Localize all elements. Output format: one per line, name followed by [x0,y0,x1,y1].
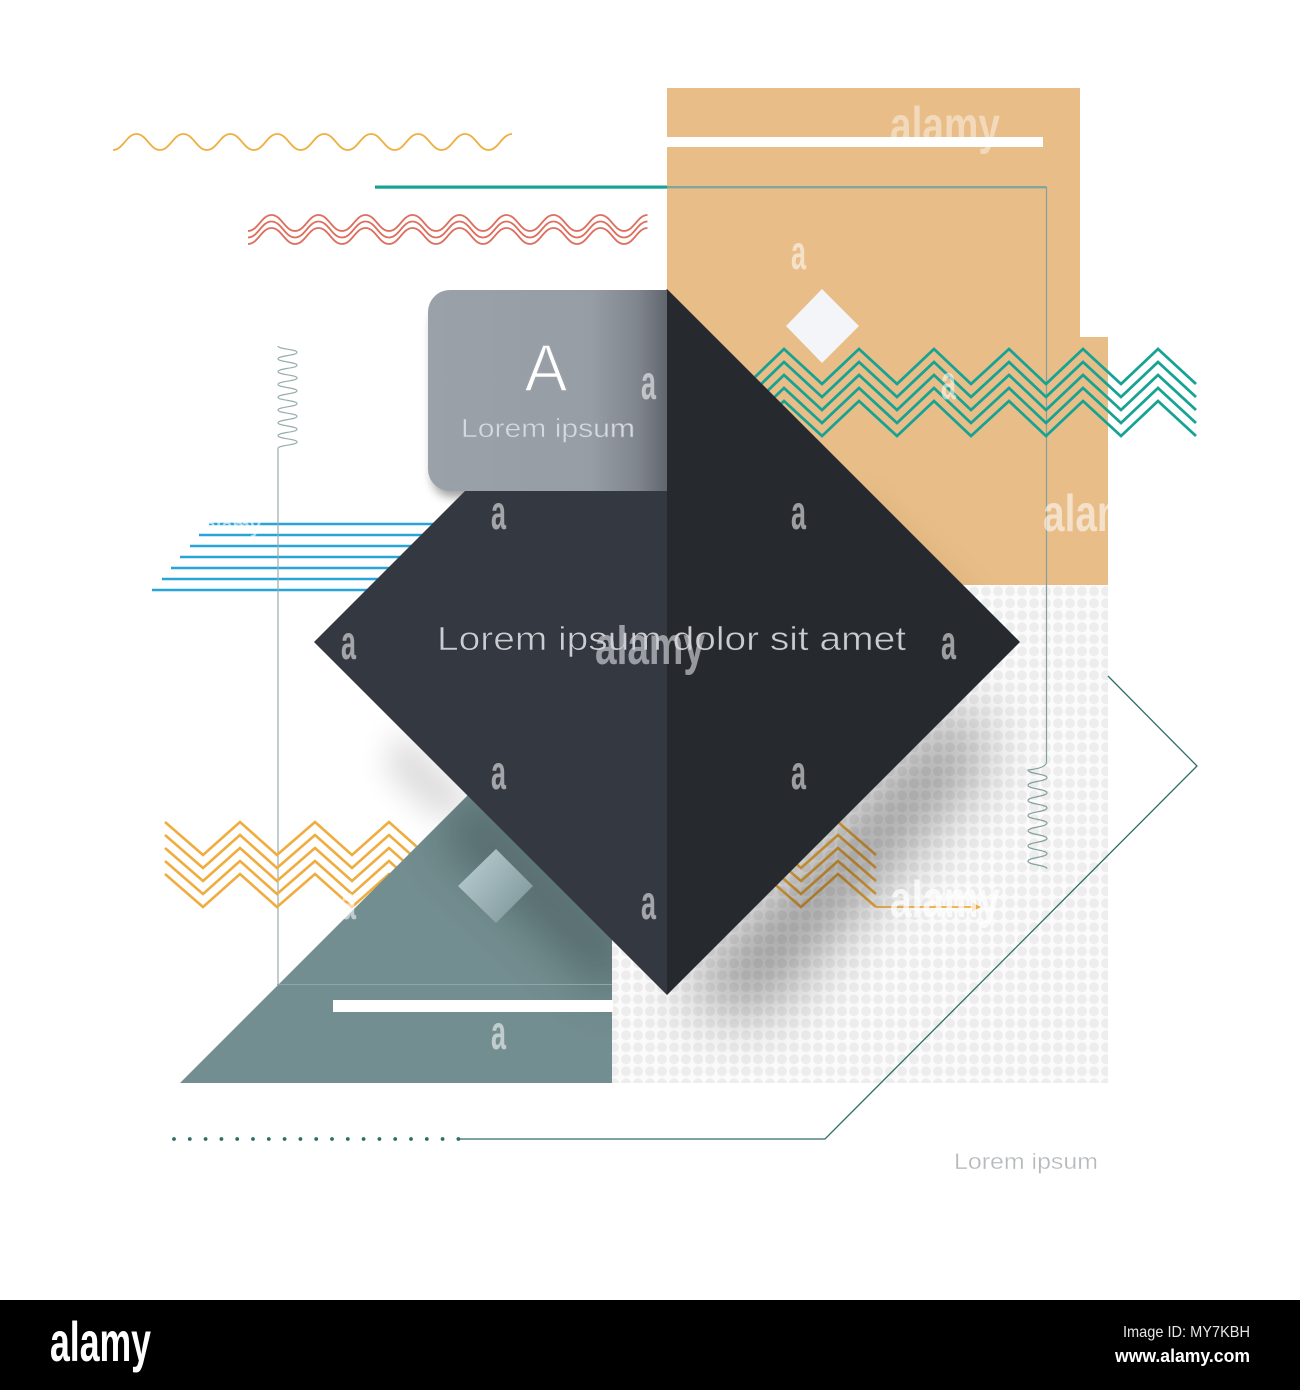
teal line, on white [375,186,667,189]
green outline connector [458,676,1197,1139]
footer bar [0,1300,1300,1390]
watermark marks: a [491,1007,506,1060]
white bar on triangle [333,1000,613,1012]
watermark marks: alamy [205,516,262,538]
panel: peach block [667,88,1108,585]
slate triangle [180,651,612,1083]
footer url: www.alamy.com [1114,1346,1250,1366]
watermark marks: a [791,747,806,800]
watermark marks: a [491,487,506,540]
card shadow [432,305,657,497]
central dark diamond [314,289,1020,995]
white diamond on peach [786,289,859,363]
watermark marks: alamy [890,871,1000,929]
watermark marks: a [941,617,956,670]
watermark marks: a [941,357,956,410]
watermark marks: alamy [595,616,705,676]
bottom right caption: Lorem ipsum [954,1149,1098,1174]
dot grid panel [612,585,1108,1083]
shadow on triangle [432,796,612,1000]
watermark marks: a [641,877,656,930]
teal line with thin vertical and spring [667,187,1047,869]
salmon triple wave [248,215,648,244]
watermark marks: a [491,747,506,800]
yellow wave line [113,134,512,150]
light diamond on triangle [458,849,533,923]
card letter: A [524,331,568,406]
footer logo: alamy [50,1310,151,1373]
footer image id: Image ID: MY7KBH [1123,1324,1250,1341]
orange zigzag [165,822,876,907]
teal zigzag [755,349,1196,436]
watermark marks [205,97,1153,1060]
watermark marks: a [791,487,806,540]
blue horizontal lines [152,524,440,590]
white bar on peach [667,137,1043,147]
shadow on white, left of diamond [385,728,480,820]
watermark marks: a [641,357,656,410]
watermark marks: alamy [890,97,1000,155]
left spring and thin vertical line [278,346,297,985]
dotted line [174,1137,459,1141]
watermark marks: a [791,227,806,280]
watermark marks: a [341,877,356,930]
orange arrow [876,902,981,912]
card A [428,290,667,491]
shadow under diamond, right [680,700,985,1015]
watermark marks: a [341,617,356,670]
thin line across triangle [277,984,612,986]
peach shadow [840,490,1020,642]
diamond headline: Lorem ipsum dolor sit amet [437,620,906,657]
card caption: Lorem ipsum [461,413,635,443]
watermark marks: alamy [1043,485,1153,543]
